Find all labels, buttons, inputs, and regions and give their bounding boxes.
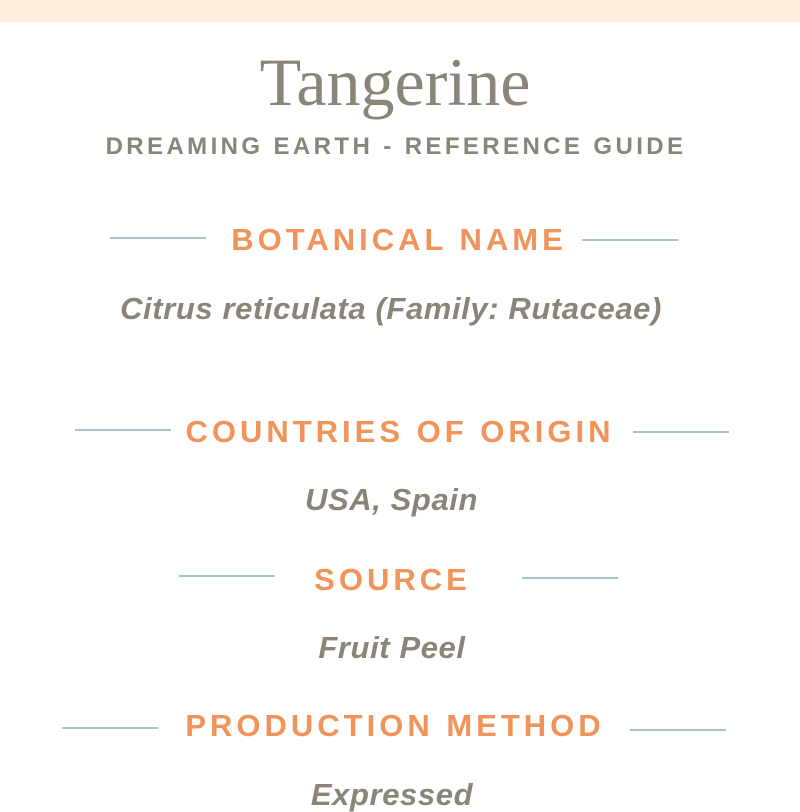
text: botanical name: Citrus reticulata (Family: Rutaceae) xyxy=(120,291,662,326)
subtitle: DREAMING EARTH - REFERENCE GUIDE xyxy=(106,133,686,160)
section: source xyxy=(179,562,618,665)
text: method: Expressed xyxy=(311,777,473,812)
text: countries: USA, Spain xyxy=(305,482,478,517)
section: countries of origin xyxy=(75,414,729,517)
heading: botanical name: BOTANICAL NAME xyxy=(231,222,567,257)
heading: countries of origin: COUNTRIES OF ORIGIN xyxy=(185,414,615,449)
heading: production method: PRODUCTION METHOD xyxy=(185,708,605,743)
text: source: Fruit Peel xyxy=(318,630,466,665)
section: production method xyxy=(62,708,726,812)
heading: source: SOURCE xyxy=(314,562,471,597)
title: Tangerine xyxy=(260,44,530,120)
section: botanical name xyxy=(110,222,678,326)
top band xyxy=(0,0,800,22)
